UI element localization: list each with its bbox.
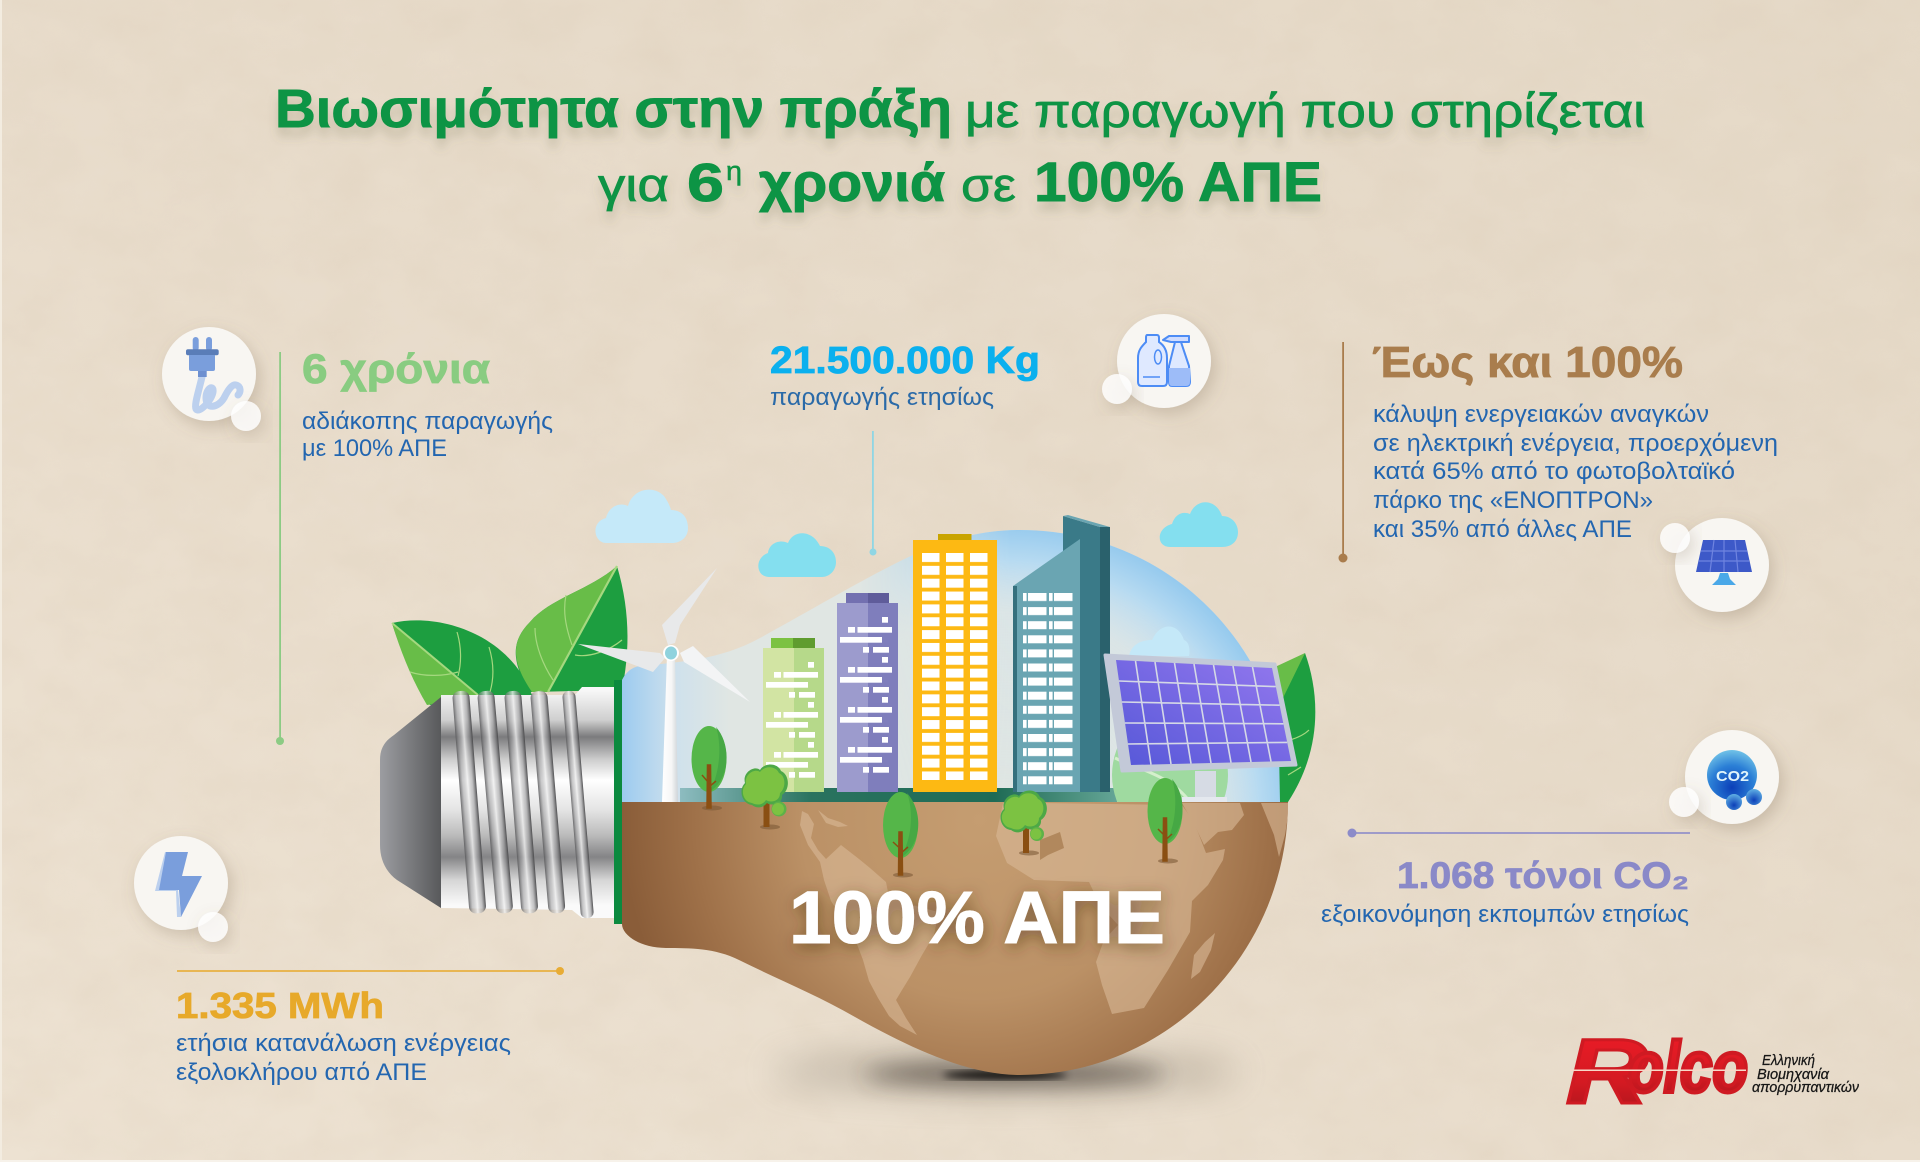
title line 2: σε: σε: [961, 158, 1016, 211]
tree 5: [1148, 778, 1183, 864]
ground strip: [680, 788, 1117, 802]
body text: με 100% ΑΠΕ: [302, 435, 447, 462]
panel frame: [1105, 655, 1296, 771]
body text: εξολοκλήρου από ΑΠΕ: [176, 1059, 427, 1086]
heading: 1.335 MWh: [176, 985, 384, 1026]
turbine blades: [662, 568, 717, 645]
title line 2: για: για: [598, 158, 669, 211]
connector line: [1348, 828, 1690, 838]
connector line: [177, 967, 564, 975]
panel cells: [1116, 660, 1291, 765]
tree 4 bushy: [1000, 790, 1047, 856]
logo wordmark: olco: [1628, 1028, 1748, 1108]
globe soil: [622, 802, 1288, 1075]
heading: 6 χρόνια: [302, 345, 490, 392]
title line 1 bold: Βιωσιμότητα στην πράξη: [275, 79, 952, 139]
green collar: [614, 680, 622, 924]
body text: αδιάκοπης παραγωγής: [302, 408, 553, 435]
title line 2: 6η: 6: [687, 153, 724, 213]
cloud: right: [1160, 502, 1238, 547]
heading: 1.068 τόνοι CO₂: [1397, 855, 1689, 896]
body text: πάρκο της «ΕΝΟΠΤΡΟΝ»: [1373, 487, 1653, 514]
leaf: right: [516, 566, 627, 692]
icon: lightning bubble: [134, 836, 228, 942]
connector line: [276, 352, 284, 745]
building: yellow: [913, 534, 997, 792]
icon: solar panel bubble: [1660, 518, 1769, 612]
title line 1 regular: με παραγωγή που στηρίζεται: [965, 84, 1645, 137]
body text: κατά 65% από το φωτοβολταϊκό: [1373, 458, 1735, 485]
cloud inside bulb: [1129, 626, 1189, 656]
logo: Rolco: [1566, 1021, 1860, 1123]
solar panel: [1105, 655, 1296, 802]
bulb ground shadow: [770, 1050, 1240, 1094]
bulb screw base: [380, 680, 622, 924]
callout: annual production: [770, 314, 1211, 411]
body text: παραγωγής ετησίως: [770, 384, 994, 411]
icon: CO2 bubble: [1669, 730, 1779, 824]
callout: 6 years: [162, 327, 553, 745]
logo tagline: απορρυπαντικών: [1752, 1080, 1860, 1096]
connector line: [1338, 342, 1348, 562]
logo wordmark: [1566, 1021, 1748, 1123]
building: green: [763, 638, 824, 792]
tree 2 bushy: [741, 764, 788, 830]
city buildings: [680, 515, 1117, 802]
logo tagline: Βιομηχανία: [1757, 1067, 1830, 1083]
building: teal tower: [1013, 515, 1110, 792]
base cap: [380, 697, 441, 908]
body text: [176, 1030, 511, 1086]
title line 2: χρονιά: χρονιά: [759, 153, 945, 213]
green glow behind panel: [1112, 748, 1228, 802]
callout: up to 100%: [1338, 338, 1778, 612]
icon: detergent bottles bubble: [1102, 314, 1211, 408]
cloud: light: [595, 490, 688, 543]
globe label: 100% ΑΠΕ: 100% ΑΠΕ: [789, 876, 1165, 959]
body text: [1373, 401, 1778, 543]
body text: ετήσια κατανάλωση ενέργειας: [176, 1030, 511, 1057]
title line 2: superscript: η: [726, 156, 742, 186]
body text: εξοικονόμηση εκπομπών ετησίως: [1321, 901, 1689, 928]
body text: [302, 408, 553, 462]
callout: energy consumption: [134, 836, 564, 1086]
body text: και 35% από άλλες ΑΠΕ: [1373, 516, 1632, 543]
logo wordmark: R: [1566, 1021, 1648, 1123]
heading: 21.500.000 Kg: [770, 340, 1040, 382]
callout: CO2 savings: [1321, 730, 1779, 928]
title line 2: 100% ΑΠΕ: 100% ΑΠΕ: [1034, 150, 1322, 213]
trees: [692, 726, 1183, 878]
world map continents: [800, 803, 1290, 1035]
heading: Έως και 100%: [1372, 338, 1683, 387]
icon: plug bubble: [162, 327, 261, 431]
panel stand: [1195, 771, 1216, 798]
turbine tower: [662, 655, 678, 802]
title: [275, 79, 1645, 213]
leaf: left: [392, 620, 532, 705]
building: purple: [837, 593, 898, 792]
wind turbine: [578, 568, 750, 802]
body text: κάλυψη ενεργειακών αναγκών: [1373, 401, 1709, 428]
body text: σε ηλεκτρική ενέργεια, προερχόμενη: [1373, 430, 1778, 457]
icon: CO2 bubble: CO2: [1716, 768, 1749, 785]
logo tagline: [1752, 1053, 1860, 1096]
turbine hub: [663, 645, 679, 661]
cloud: middle: [758, 533, 836, 577]
right leaf: [1275, 653, 1315, 802]
threads: [452, 690, 594, 919]
tree 1: [692, 726, 727, 810]
logo tagline: Ελληνική: [1762, 1053, 1815, 1069]
connector: production line: [870, 431, 876, 556]
metal thread body: [441, 687, 615, 918]
left leaves: [392, 566, 627, 705]
bulb glass: [622, 530, 1288, 802]
tree 3: [883, 792, 918, 878]
